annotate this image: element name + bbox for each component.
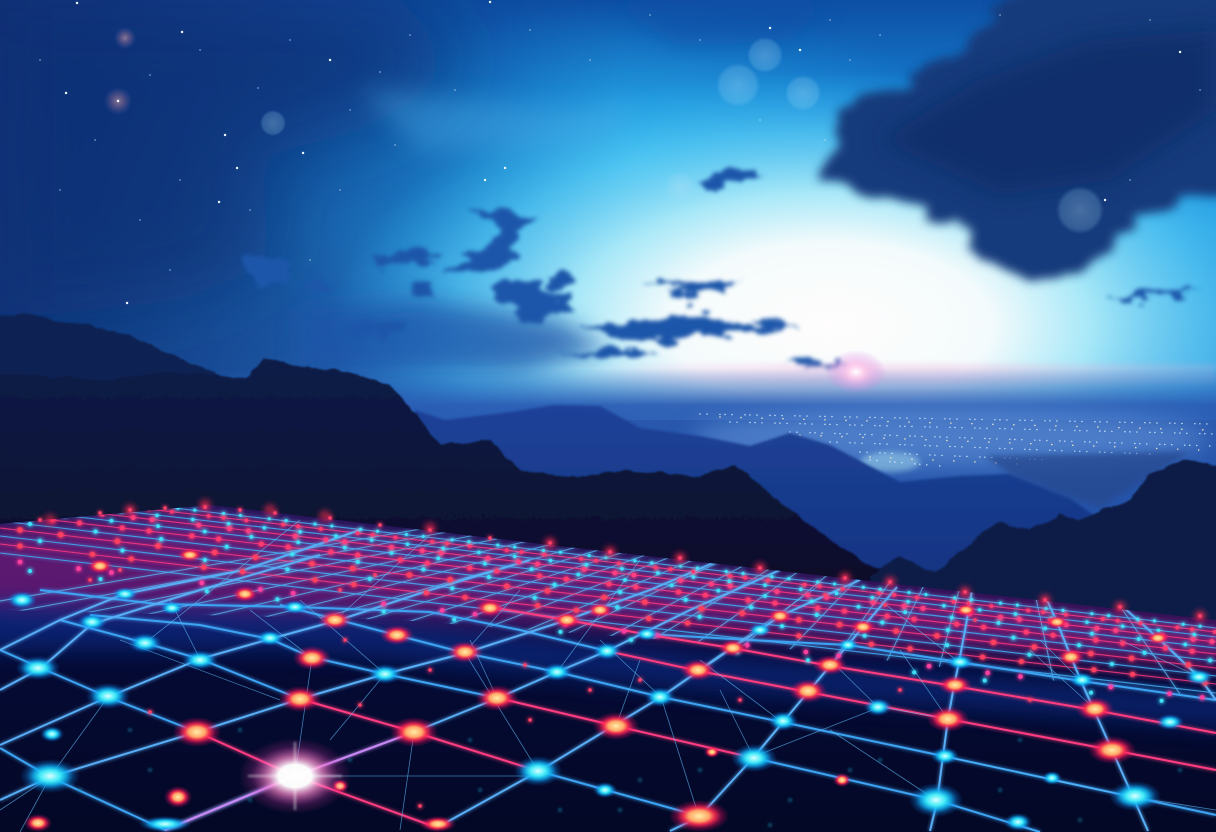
far row lines, red <box>0 492 1216 684</box>
sky background <box>0 0 1216 420</box>
distant city lights <box>690 408 1216 472</box>
sun spot on horizon <box>826 350 886 394</box>
dim teal dust on the near surface <box>80 730 1180 825</box>
stars and bokeh orbs <box>40 2 1200 303</box>
fine web lines between nodes <box>0 520 1216 832</box>
red glow along the far edge of the network <box>50 505 1200 616</box>
small nodes along far rows <box>0 489 1216 707</box>
large nodes <box>7 548 1213 832</box>
main lattice lines running right and up <box>0 530 1216 831</box>
far haze band <box>0 368 1216 538</box>
bright white flare node <box>239 738 351 814</box>
far fan lines from the vanishing point <box>0 528 1182 694</box>
scattered sparks <box>40 507 1200 806</box>
far row lines, blue <box>0 488 1216 693</box>
network surface <box>0 505 1216 832</box>
lavender lines leaving the flare node <box>165 732 414 830</box>
main lattice lines running right and down, red <box>197 607 1216 828</box>
clouds: small wisps near the horizon <box>245 168 1204 368</box>
clouds: large soft dark masses <box>0 0 1216 372</box>
pink horizon glow <box>540 364 1216 384</box>
cyan nodes <box>7 587 1213 832</box>
network grid lines <box>0 507 1216 832</box>
red nodes <box>24 548 1170 832</box>
main lattice lines running right and down, blue <box>0 590 1216 832</box>
glow haze on the far part of the network <box>0 510 1216 730</box>
far blue mountains <box>415 405 1190 620</box>
near dark mountains right <box>870 460 1216 640</box>
near dark mountains left <box>0 313 900 600</box>
